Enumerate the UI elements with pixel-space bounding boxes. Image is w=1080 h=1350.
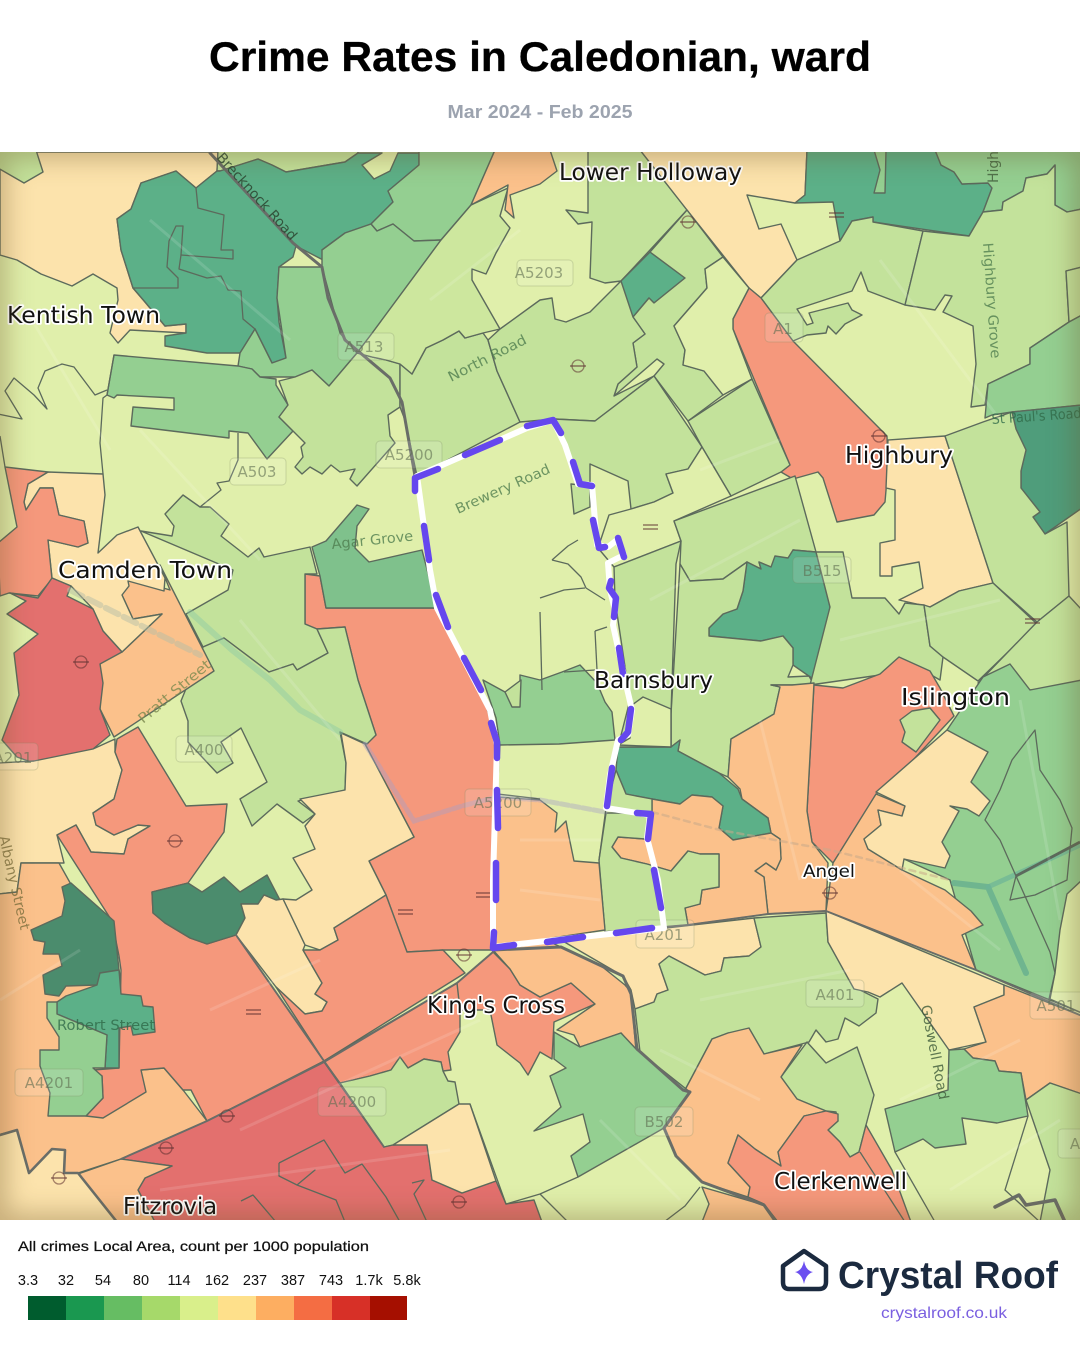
- road shields: A: [1070, 1135, 1080, 1153]
- road names: North Road: [446, 332, 529, 386]
- legend scale labels: 54: [95, 1273, 111, 1289]
- place labels: Fitzrovia: [123, 1194, 217, 1220]
- road names: Robert Street: [57, 1018, 156, 1034]
- road names: High: [986, 151, 1002, 183]
- main roads: [0, 153, 1080, 1225]
- place labels: Camden Town: [58, 558, 232, 584]
- road shields: A501: [1037, 997, 1075, 1015]
- legend scale labels: 32: [58, 1273, 74, 1289]
- road names: Agar Grove: [331, 528, 414, 553]
- place labels: Lower Holloway: [559, 160, 742, 186]
- road shields: [0, 260, 1080, 1158]
- road shields: A5203: [515, 264, 563, 282]
- road names: Brecknock Road: [213, 150, 300, 244]
- place labels: King's Cross: [427, 993, 565, 1019]
- road shields: A201: [645, 926, 683, 944]
- legend: [18, 1238, 421, 1320]
- place labels: Kentish Town: [7, 303, 160, 329]
- legend title: All crimes Local Area, count per 1000 population: [18, 1238, 369, 1254]
- ward boundary: Caledonian: [415, 420, 664, 948]
- road shields: B502: [645, 1113, 683, 1131]
- legend scale labels: 80: [133, 1273, 149, 1289]
- place labels: Islington: [901, 685, 1010, 711]
- legend scale labels: 162: [205, 1273, 229, 1289]
- legend scale labels: 114: [167, 1273, 191, 1289]
- street texture: [0, 220, 1060, 1200]
- legend scale labels: [18, 1273, 421, 1289]
- legend scale labels: 3.3: [18, 1273, 38, 1289]
- title: Crime Rates in Caledonian, ward: [209, 33, 871, 80]
- canal and river: [70, 590, 1080, 973]
- road names: Pratt Street: [135, 657, 215, 727]
- legend scale labels: 743: [319, 1273, 343, 1289]
- road shields: A513: [345, 338, 383, 356]
- tube and rail icons: [51, 213, 1040, 1208]
- subtitle: date range: Mar 2024 - Feb 2025: [448, 102, 632, 122]
- road names: Goswell Road: [917, 1004, 951, 1101]
- road shields: A400: [185, 741, 223, 759]
- place labels: [7, 160, 1010, 1220]
- place labels: Barnsbury: [594, 668, 713, 694]
- road shields: A5200: [474, 794, 522, 812]
- legend scale labels: 387: [281, 1273, 305, 1289]
- road names: Brewery Road: [453, 462, 553, 518]
- road shields: A503: [238, 463, 276, 481]
- website url: crystalroof.co.uk: [881, 1305, 1008, 1322]
- legend colour bar: [28, 1296, 407, 1320]
- road names: Highbury Grove: [979, 242, 1003, 359]
- map edge vignette: [0, 152, 1080, 1220]
- road shields: A5200: [385, 446, 433, 464]
- legend scale labels: 237: [243, 1273, 267, 1289]
- icon: house with star: [783, 1251, 826, 1289]
- choropleth map: [0, 150, 1080, 1225]
- place labels: Highbury: [845, 443, 953, 469]
- place labels: Clerkenwell: [774, 1169, 907, 1195]
- logo: Crystal Roof: [783, 1251, 1058, 1322]
- boundary lines: [0, 188, 1080, 1222]
- legend scale labels: 5.8k: [393, 1273, 421, 1289]
- road shields: A401: [816, 986, 854, 1004]
- road shields: B515: [803, 562, 841, 580]
- place labels: Angel: [803, 862, 855, 882]
- road shields: A4201: [25, 1074, 73, 1092]
- road shields: A1: [773, 320, 793, 338]
- road names: [0, 150, 1080, 1101]
- legend scale labels: 1.7k: [355, 1273, 383, 1289]
- logo wordmark: Crystal Roof: [838, 1255, 1058, 1297]
- road shields: A4200: [328, 1093, 376, 1111]
- map regions: [0, 150, 1080, 1222]
